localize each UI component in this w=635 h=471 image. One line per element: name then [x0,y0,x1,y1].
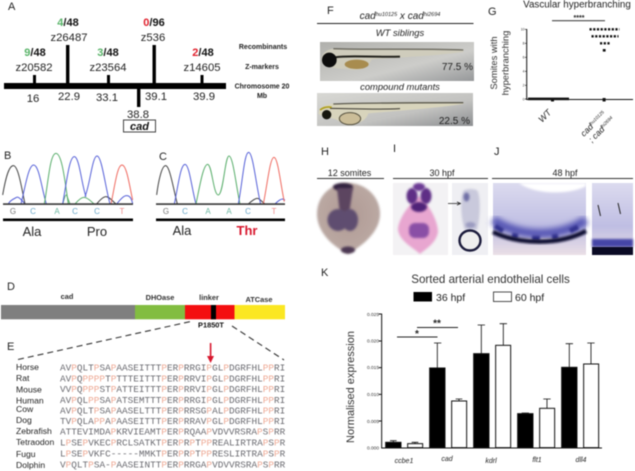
aligned sequences: AVPQLTPSAPAASELTTTPERPRRSGPALPDGRFHLPPRI [60,406,285,416]
amino acids B: Pro [87,224,107,239]
whole mount photo [393,183,448,255]
domain bar [1,305,285,319]
amino acids C: Ala [173,223,192,238]
bases B: C [72,207,78,216]
baseline B [3,203,133,205]
baseline C [156,203,285,205]
bars and axes [379,314,602,448]
bases B [10,207,125,216]
WT percentage: 77.5 % [442,62,473,73]
recombinant counts: 4/48 [57,17,79,29]
species names [16,362,54,470]
panel J: 48 hpf vessels [492,146,633,255]
heading D: D [7,281,15,293]
positions in Mb: 38.8 [127,109,149,121]
z-markers: z20582 [15,62,53,74]
legend: 60 hpf [515,292,544,304]
stage label J: 48 hpf [552,168,578,178]
y tick labels: 0.000 [367,446,379,452]
domain labels: P1850T [198,320,224,330]
bases C: A [226,207,232,216]
z-markers: z26487 [50,32,88,44]
aligned sequences [60,362,286,470]
gene labels: kdrl [485,458,497,465]
y tick labels: 8 [523,42,525,46]
stage label I: 30 hpf [429,168,455,178]
x tick labels: hi2694 [600,115,614,128]
bars 36 hpf [386,354,577,448]
heading K: K [321,267,329,279]
bases C [163,207,277,216]
cross title: hu10125 [376,12,398,18]
positions in Mb: 33.1 [96,92,118,104]
bases C: C [182,207,188,216]
gene labels: dll4 [576,457,587,464]
heading F: F [327,5,334,17]
mutant percentage: 22.5 % [439,116,470,127]
y axis label: Somites with [488,36,499,90]
chromosome bar and ticks [4,45,226,107]
significance bar: **** [574,15,585,22]
domain labels: cad [61,292,74,301]
left section photo [493,183,586,255]
error bars [390,324,595,444]
aligned sequences: AVPQLPPSAPATSEMTTTPERPRRGIPGLPDGRFHLPPRI [60,395,285,406]
heading A: A [8,1,16,13]
x tick labels: ; cad [586,124,607,144]
title rule [317,23,474,24]
y axis label: Normalised expression [345,331,357,443]
data points [528,29,620,101]
chart title: Sorted arterial endothelial cells [411,273,570,286]
species names: Fugu [16,449,36,459]
gene labels: flt1 [532,457,542,464]
heading I: I [393,143,396,155]
peak traces C [157,152,285,204]
legend [414,292,544,304]
significance marks [397,318,458,340]
heading C: C [159,151,167,163]
bars 60 hpf [408,345,599,448]
y tick labels: 0.005 [367,419,379,425]
y tick labels: 10 [521,28,525,32]
domain labels [61,292,272,330]
positions in Mb [27,91,215,121]
x tick labels [536,106,617,144]
z-markers: z536 [141,32,165,44]
z-markers: z23564 [89,62,127,74]
heading E: E [7,341,14,353]
cross title: cad [360,11,376,22]
bases B: C [94,207,100,216]
panel D: protein domains [1,281,285,360]
row labels: Mb [257,93,267,100]
WT label: WT siblings [376,27,425,38]
amino acids B [23,224,107,239]
panel A: genetic map [4,1,290,133]
section photo [448,183,488,255]
species names: Dolphin [16,460,45,470]
aligned sequences: LPSEPVKECPRCLSATKTPERPRPTPPREALIRTRAPSPR [60,438,286,448]
aligned sequences: ATTEVIMDAPKRVIEAMTPERPRQAAPVDVVRSRAPSPRR [60,426,286,438]
heading H: H [321,146,329,158]
right section photo [592,183,633,255]
stage rule I [393,178,488,179]
y tick labels: 0 [523,98,525,102]
gene labels: ccbe1 [395,458,413,465]
stage rule H [317,178,384,179]
cad box: cad [130,121,149,133]
codon bar C [156,218,285,221]
panel B: chromatogram wild type [3,150,133,239]
species names: Tetraodon [16,437,54,447]
cross title: hi2694 [424,12,440,18]
gene labels [395,456,587,465]
y axis label: hyperbranching [500,31,510,95]
z-markers: z14605 [183,62,221,74]
vessel arrows [598,203,620,216]
species names: Cow [16,404,34,414]
mutant fish photo [317,93,473,126]
gene labels: cad [441,456,454,463]
bases B: T [120,207,125,216]
aligned sequences: AVPQPPPPTPTTTEITTTPERPRRVIPGLPDGRFHLPPRI [60,374,285,384]
bases B: A [54,207,60,216]
species names: Human [16,396,44,406]
species names: Zebrafish [16,426,52,436]
species names: Dog [16,415,32,425]
cross title: x cad [397,11,424,22]
aligned sequences: TVPQLAPPAPAASEITTTPERPRRAVPGLPDGRFHLPPRI [60,416,285,427]
aligned sequences: VPQLTPSA-PAASEINTTPERPRRGAPVDVVRSRAPSPRR [60,460,286,470]
section arrow [448,202,460,205]
heading J: J [494,146,500,158]
mutation arrow [207,343,214,363]
mutant label: compound mutants [360,81,440,92]
y tick labels: 0.015 [367,365,379,371]
y tick labels: 4 [523,70,525,74]
y tick labels: 2 [523,84,525,88]
bases B: C [30,207,36,216]
panel E: sequence alignment [7,341,286,470]
species names: Horse [16,362,39,372]
axes [525,29,633,100]
aligned sequences: VVPQPPPSTPATTEITTTPERPRRVIPGLPDGRFHLPPRI [60,384,285,395]
stage rule J [492,178,633,179]
significance bar [552,15,605,22]
row labels [235,44,290,100]
species names: Rat [16,373,30,383]
peak traces B [3,153,133,204]
domain labels: DHOase [146,293,174,302]
panel G: hyperbranching scatter [488,0,633,144]
z-markers [15,32,221,74]
amino acids C [173,223,257,238]
panel K: expression bar chart [321,267,602,465]
positions in Mb: 39.1 [145,91,167,103]
amino acids B: Ala [23,224,42,239]
aligned sequences: AVPQLTPSAPAASEITTTPERPRRGIPGLPDGRFHLPPRI [60,362,285,374]
axes K [379,314,602,448]
x tick labels: hu10125 [589,109,605,126]
species names: Mouse [16,384,42,394]
y tick labels: 0.020 [367,338,379,344]
significance marks: * [415,329,419,340]
bases C: C [245,207,251,216]
domain labels: ATCase [246,295,272,304]
panel I: 30 hpf embryo and section [393,143,488,255]
y tick labels: 0.010 [367,392,379,398]
embryo photo [317,183,380,254]
row labels: Recombinants [239,44,287,51]
panel C: chromatogram mutant [156,151,285,238]
bases C: T [272,207,277,216]
x tick labels: cad [578,122,595,138]
WT fish photo [320,42,474,81]
recombinant counts: 9/48 [24,47,46,59]
legend: 36 hpf [436,292,465,304]
positions in Mb: 39.9 [193,91,215,103]
panel H: 12 somites embryo [317,146,384,254]
row labels: Chromosome 20 [235,84,290,90]
aligned sequences: LPSEPVKFC-----MMKTPERPRPTPPRESLIRTRAPSPR [60,448,286,460]
bases C: G [163,207,169,216]
recombinant counts: 0/96 [143,17,165,29]
significance marks: ** [433,318,441,330]
cad box [124,120,156,133]
heading B: B [4,150,11,162]
zoom dashes [18,321,284,360]
recombinant counts: 2/48 [192,47,214,59]
codon bar B [3,218,133,221]
x tick labels: WT [536,106,554,124]
bases B: G [10,207,16,216]
row labels: Z-markers [245,64,279,71]
y tick labels [521,28,525,102]
stage label H: 12 somites [328,168,372,178]
domain labels: linker [199,293,219,302]
y tick labels: 0.025 [367,312,379,318]
y tick labels: 6 [523,56,525,60]
heading G: G [488,6,497,18]
amino acids C: Thr [237,223,257,238]
recombinant counts [24,17,214,59]
positions in Mb: 16 [27,93,39,105]
y tick labels [367,312,379,452]
positions in Mb: 22.9 [58,91,80,103]
bases C: A [205,207,211,216]
recombinant counts: 3/48 [97,47,119,59]
panel F: compound mutant fish [317,5,474,127]
